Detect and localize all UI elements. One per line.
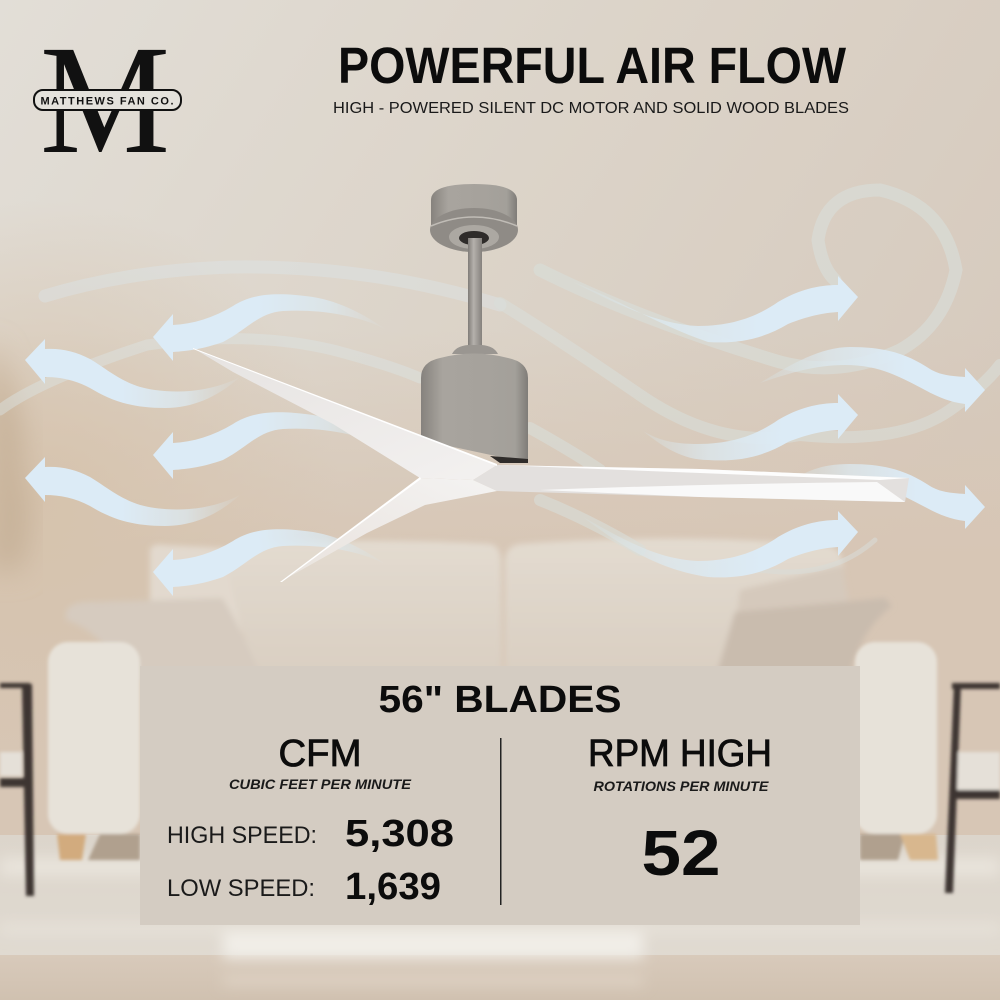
- blade: lower highlight: [280, 477, 421, 582]
- arrow: middle left: [153, 412, 385, 479]
- right pillow upper: [735, 565, 850, 630]
- rear cushion: [150, 545, 250, 670]
- logo badge: [34, 90, 181, 110]
- blade: right: [473, 465, 909, 502]
- arrow: far left lower: [25, 457, 240, 526]
- logo letter M: M: [40, 13, 170, 186]
- arrow: lower right: [583, 511, 858, 577]
- arms: [48, 642, 140, 834]
- high speed value: 5,308: [345, 813, 454, 855]
- arrow: far right lower: [790, 464, 985, 529]
- left chair: [0, 683, 30, 688]
- divider: [500, 738, 502, 905]
- CFM caption: CUBIC FEET PER MINUTE: [229, 776, 412, 792]
- downrod: [468, 238, 482, 348]
- RPM heading: RPM HIGH: [588, 733, 772, 775]
- ceiling canopy: [430, 184, 518, 252]
- blade: lower: [280, 478, 497, 582]
- panel: specifications: [140, 666, 860, 925]
- CFM heading: CFM: [278, 733, 362, 775]
- ceiling fan: [193, 184, 909, 582]
- RPM caption: ROTATIONS PER MINUTE: [594, 778, 769, 794]
- title: POWERFUL AIR FLOW: [338, 37, 847, 94]
- low speed value: 1,639: [345, 866, 441, 908]
- arrow: middle right: [643, 394, 858, 460]
- high speed label: HIGH SPEED:: [167, 822, 317, 849]
- faint air ribbons: [0, 190, 1000, 572]
- left pillow: [66, 598, 262, 680]
- low speed label: LOW SPEED:: [167, 875, 315, 902]
- right chair: [952, 683, 1000, 689]
- blade: left highlight: [193, 348, 497, 466]
- logo: [34, 13, 181, 186]
- logo badge: MATTHEWS FAN CO.: [40, 96, 174, 108]
- air flow arrows: [25, 276, 985, 596]
- arrow: lower left: [153, 529, 385, 596]
- subtitle: HIGH - POWERED SILENT DC MOTOR AND SOLID WOOD BLADES: [333, 100, 849, 117]
- blade: left: [193, 348, 497, 480]
- motor housing: [421, 345, 528, 463]
- left back cushion: [224, 541, 502, 680]
- panel heading: 56" BLADES: [378, 679, 622, 721]
- arrow: far right upper: [760, 347, 985, 412]
- arrow: far left upper: [25, 339, 240, 408]
- right pillow: [715, 598, 892, 680]
- arrow: upper left: [153, 294, 385, 361]
- arrow: upper right: [573, 276, 858, 342]
- right back cushion: [505, 538, 845, 680]
- RPM value: 52: [642, 817, 720, 889]
